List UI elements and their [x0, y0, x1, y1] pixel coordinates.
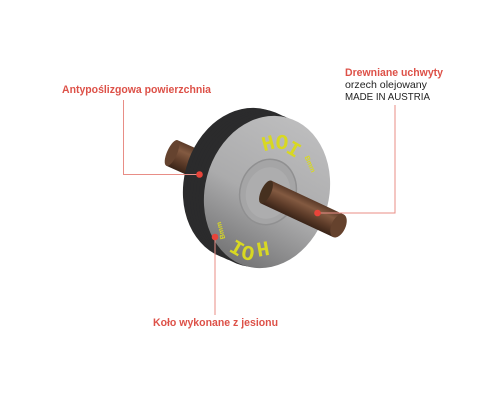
leader line [214, 238, 216, 315]
icon: ab wheel [162, 94, 350, 282]
leader line [124, 100, 199, 174]
left wooden handle [162, 138, 219, 184]
callout: ash wheel [153, 234, 278, 329]
hub centre [240, 162, 296, 224]
logo bottom: HOI [227, 233, 271, 263]
right wooden handle [256, 179, 350, 240]
label: Koło wykonane z jesionu [153, 317, 278, 329]
callout: wooden handles [314, 67, 444, 216]
logo bottom: small text: Bmm [216, 221, 227, 240]
logo top: small text: Bmm [303, 155, 316, 174]
black rubber rim [166, 94, 342, 281]
label detail: orzech olejowany [345, 79, 428, 91]
marker dot [196, 171, 203, 178]
logo top: HOI: O [274, 132, 289, 156]
callout: antislip surface [62, 84, 212, 178]
logo top: HOI: H [260, 133, 278, 158]
logo top: HOI: I [282, 138, 304, 164]
logo bottom: HOI: O [240, 238, 257, 263]
marker dot [212, 234, 218, 240]
grey wheel face [187, 102, 347, 282]
logo bottom: HOI: I [227, 233, 249, 259]
leader line [318, 105, 395, 213]
hub ring [232, 153, 304, 231]
logo bottom: HOI: H [254, 234, 271, 259]
label: Antypoślizgowa powierzchnia [62, 84, 212, 96]
label origin: MADE IN AUSTRIA [345, 91, 430, 103]
marker dot [314, 210, 321, 216]
label heading: Drewniane uchwyty [345, 67, 444, 79]
logo top: HOI [260, 132, 304, 164]
